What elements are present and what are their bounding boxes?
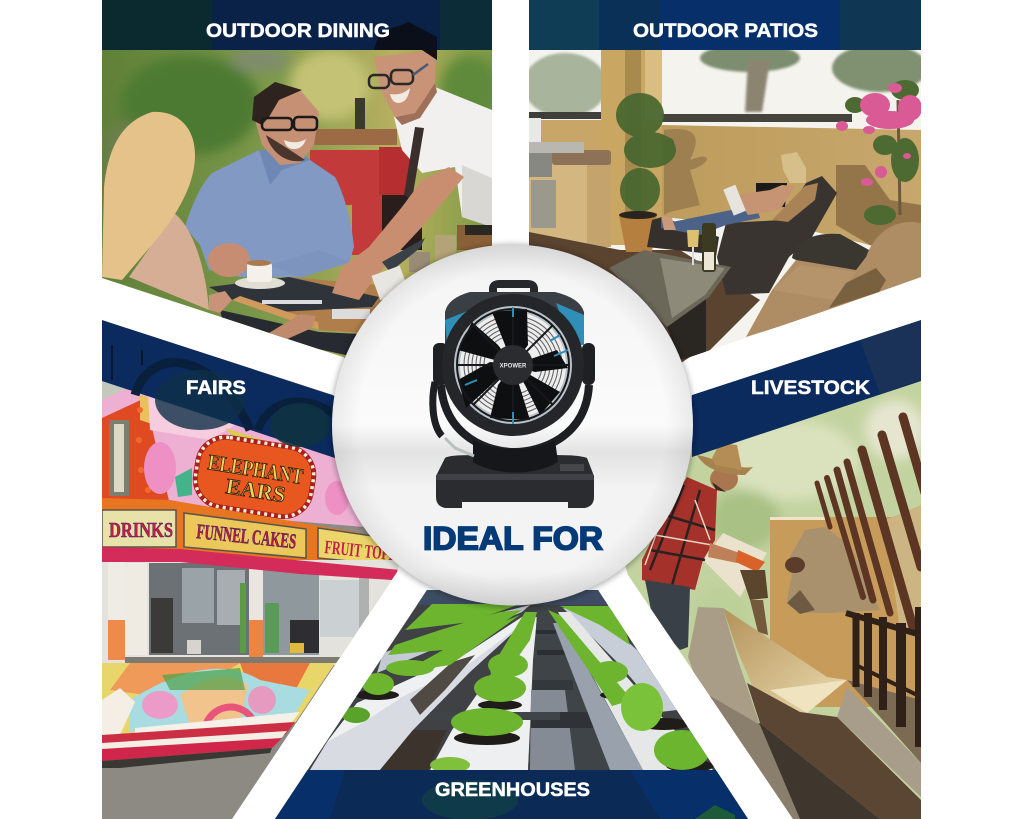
right gutter [558, 612, 713, 770]
header band: outdoor dining [102, 0, 492, 50]
waiter [332, 50, 492, 300]
windows [102, 560, 402, 665]
dining table [209, 260, 390, 356]
header band: greenhouses: GREENHOUSES [435, 779, 590, 801]
blonde woman [102, 112, 209, 310]
man in blue shirt [185, 82, 354, 278]
orange sign board [102, 498, 400, 575]
potted plant [616, 93, 676, 252]
awning [102, 547, 400, 580]
header band: livestock: LIVESTOCK [751, 377, 870, 399]
header band: outdoor patios [529, 0, 921, 50]
panel: greenhouses [270, 590, 760, 819]
header band: fairs [102, 320, 335, 458]
bougainvillea [836, 80, 922, 225]
wooden fence [817, 417, 925, 747]
header band: outdoor dining: OUTDOOR DINING [206, 20, 390, 42]
wicker chair with woman [647, 152, 837, 295]
farmer [642, 443, 768, 650]
sofa [746, 222, 921, 337]
painted lower wall [102, 663, 335, 768]
header band: outdoor patios: OUTDOOR PATIOS [633, 20, 818, 42]
angled gutter [553, 623, 643, 770]
panel: livestock [600, 320, 925, 819]
header band: livestock [692, 320, 921, 457]
orange sign board: FUNNEL CAKES [195, 519, 297, 553]
header band: greenhouses [270, 770, 760, 819]
outdoor kitchen [529, 118, 611, 247]
panel: outdoor dining [102, 50, 492, 358]
yoke and arms [433, 343, 595, 452]
red chairs [310, 147, 422, 255]
panel: fairs [102, 320, 422, 819]
ideal for label: IDEAL FOR [423, 520, 603, 556]
elephant ears top art [102, 389, 364, 527]
elephant ears sign [191, 433, 318, 521]
trough [688, 607, 921, 819]
elephant ears sign: EARS [224, 473, 287, 507]
lettuce rows [342, 604, 710, 773]
fan head [442, 294, 584, 436]
orange sign board: DRINKS [109, 518, 173, 542]
waiter hair [374, 50, 437, 60]
header band: fairs: FAIRS [186, 377, 246, 399]
icon: fan product [433, 280, 595, 508]
center gutter [430, 617, 537, 770]
fan base [436, 440, 594, 508]
orange sign board: FRUIT TOPP [323, 537, 398, 566]
panel: outdoor patios [529, 50, 921, 362]
wall and cow [770, 505, 921, 707]
front left gutter [310, 617, 525, 770]
far gutters [377, 605, 677, 712]
coffee table [609, 223, 731, 360]
fan head: XPOWER [500, 364, 527, 370]
fan body [445, 280, 584, 345]
planting holes [355, 690, 714, 772]
center disc [330, 244, 694, 608]
elephant ears sign: ELEPHANT [206, 449, 305, 489]
central aisle [430, 612, 610, 770]
power cord plug [445, 438, 474, 456]
